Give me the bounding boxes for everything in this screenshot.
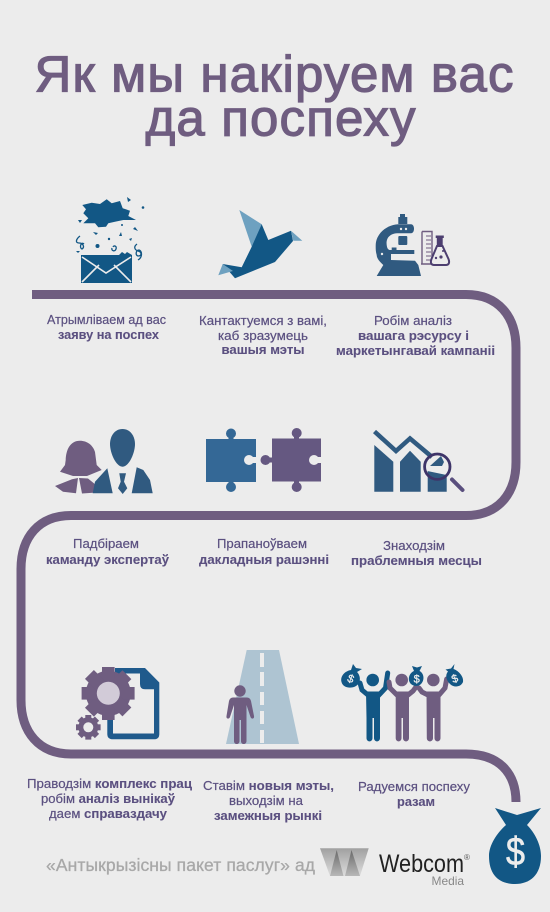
text: step 8: замежныя рынкі [214, 808, 322, 823]
icon: falling chart with magnifier [374, 432, 462, 492]
text: step 2: Кантактуемся з вамі, [199, 313, 327, 328]
text: step 1: заяву на поспех [58, 327, 160, 342]
icon: team of experts [55, 429, 153, 494]
icon: three people with money bags: $ [450, 673, 460, 686]
icon: origami bird [218, 210, 302, 278]
text: step 5: дакладныя рашэнні [199, 552, 329, 567]
text: step 7 [27, 776, 192, 821]
icon: three people with money bags [341, 664, 463, 741]
text: step 2: вашыя мэты [222, 342, 305, 357]
text: step 3: вашага рэсурсу і [358, 328, 469, 343]
text: step 4: каманду экспертаў [46, 552, 170, 567]
icon: money bag with dollar: $ [506, 830, 525, 874]
icon: microscope and flasks [376, 214, 449, 276]
icon: money bag with dollar [489, 808, 541, 884]
title [34, 46, 514, 146]
figure: middle purple person [389, 674, 417, 741]
icon: gears and document [76, 667, 159, 740]
text: step 9: разам [397, 794, 435, 809]
title: Як мы накіруем вас [34, 46, 514, 102]
text: step 6 [351, 538, 482, 568]
logo: Webcom Media: Media [432, 874, 464, 888]
icon: envelope with burst [76, 197, 144, 283]
logo: Webcom Media: Webcom [379, 850, 464, 878]
text: step 3 [336, 313, 495, 358]
text: step 4 [46, 536, 170, 567]
icon: puzzle pieces [206, 428, 322, 492]
text: step 1: Атрымліваем ад вас [47, 312, 167, 327]
text: step 7: Праводзім комплекс прац [27, 776, 192, 791]
text: step 5: Прапаноўваем [217, 536, 307, 551]
text: step 6: Знаходзім [383, 538, 445, 553]
text: step 5 [199, 536, 329, 567]
logo: Webcom Media [320, 848, 470, 888]
text: step 9 [358, 779, 471, 809]
money bags [341, 664, 463, 688]
winding path line [21, 294, 516, 802]
text: step 8 [203, 778, 334, 823]
icon: three people with money bags: $ [414, 674, 420, 686]
text: step 7: даем справаздачу [49, 806, 168, 821]
icon: road with person [226, 650, 299, 744]
footer caption: «Антыкрызісны пакет паслуг» ад [46, 855, 315, 875]
text: step 2 [199, 313, 327, 357]
figure: right purple person [419, 674, 447, 741]
text: step 8: выходзім на [229, 793, 304, 808]
text: step 9: Радуемся поспеху [358, 779, 471, 794]
text: step 2: каб зразумець [218, 328, 308, 343]
text: step 7: робім аналіз вынікаў [41, 791, 176, 806]
text: step 4: Падбіраем [73, 536, 139, 551]
icon: three people with money bags: $ [346, 673, 355, 686]
text: step 6: праблемныя месцы [351, 553, 482, 568]
text: step 8: Ставім новыя мэты, [203, 778, 334, 793]
title: да поспеху [146, 90, 416, 146]
text: step 3: Робім аналіз [374, 313, 452, 328]
text: step 1 [47, 312, 167, 342]
text: step 3: маркетынгавай кампаніі [336, 343, 495, 358]
logo: Webcom Media: ® [464, 853, 470, 862]
figure: blue person [360, 673, 388, 741]
